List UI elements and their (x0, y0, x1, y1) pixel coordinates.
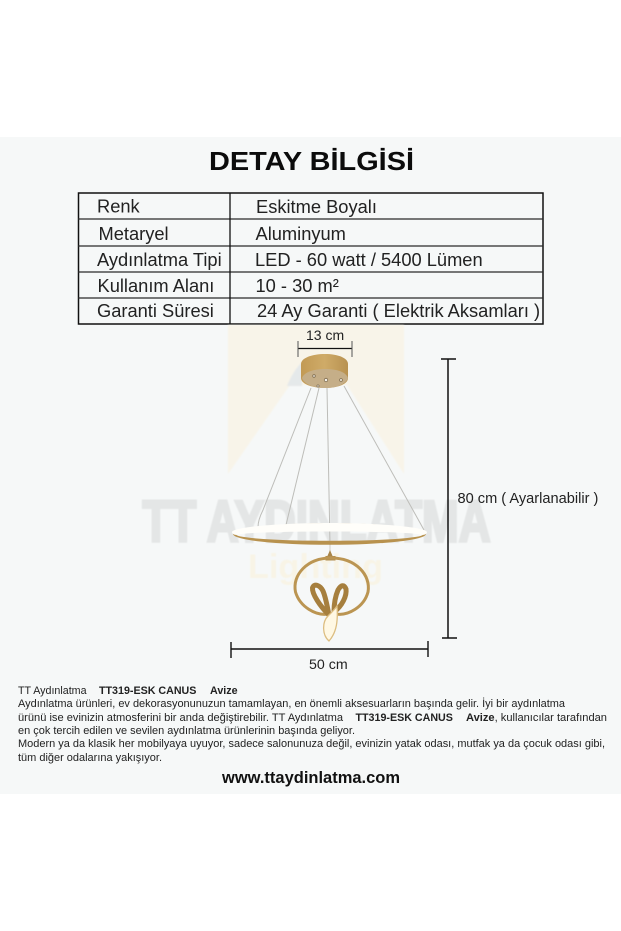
table values: Aluminyum (256, 223, 346, 244)
watermark: lighting: Lighting (248, 548, 383, 586)
table labels: Aydınlatma Tipi (97, 249, 222, 270)
table values: Eskitme Boyalı (256, 196, 377, 217)
dimension: 50 cm (231, 641, 428, 673)
text block: description: Avize (210, 685, 238, 697)
table labels (97, 196, 222, 321)
small ring and ribbon (295, 545, 368, 641)
panel: background (0, 137, 621, 794)
table values: 10 - 30 m² (256, 275, 339, 296)
ribbon loops (312, 585, 329, 615)
text block: description: ürünü ise evinizin atmosferini bir anda değiştirebilir. TT Aydınlatma (18, 712, 343, 724)
table values: 24 Ay Garanti ( Elektrik Aksamları ) (257, 300, 540, 321)
ribbon lance (324, 606, 337, 641)
lamp canopy (301, 354, 348, 388)
text block: description: Avize, kullanıcılar tarafından (466, 712, 607, 724)
large ring (232, 523, 427, 545)
text block: description (18, 685, 607, 764)
text block: description: tüm diğer odalarına yakışıyor. (18, 752, 162, 764)
table values: LED - 60 watt / 5400 Lümen (255, 249, 483, 270)
text block: description: TT319-ESK CANUS (99, 685, 196, 697)
table labels: Garanti Süresi (97, 300, 214, 321)
text block: description: TT Aydınlatma (18, 685, 87, 697)
watermark: grey shadow behind canopy (287, 362, 302, 386)
text block: description: en çok tercih edilen ve sevilen aydınlatma ürünlerinin başında geliyor. (18, 725, 355, 737)
table labels: Metaryel (98, 223, 169, 244)
website address: www.ttaydinlatma.com (221, 768, 400, 787)
table values (255, 196, 540, 321)
lamp wires (258, 386, 424, 545)
dimension: 50 cm: 50 cm (309, 657, 348, 673)
dimension: 80 cm (441, 359, 598, 638)
text block: description: Modern ya da klasik her mobilyaya uyuyor, sadece salonunuza değil, evinizin yatak odası, mutfak ya da çocuk odası gibi, (18, 738, 605, 750)
text block: description: Aydınlatma ürünleri, ev dekorasyonunuzun tamamlayan, en önemli aksesuarların başında gelir. İyi bir aydınlatma (18, 697, 565, 710)
title: DETAY BİLGİSİ (209, 148, 414, 176)
watermark: company name: TT AYDINLATMA (142, 490, 490, 554)
icon: pendant lamp (232, 354, 427, 641)
watermark: cream light cone (228, 325, 404, 474)
table labels: Renk (97, 196, 141, 216)
dimension: 80 cm: 80 cm ( Ayarlanabilir ) (458, 491, 598, 507)
dimension: 13 cm (298, 327, 352, 357)
panel: specification table (78, 193, 543, 324)
text block: description: TT319-ESK CANUS (356, 712, 453, 724)
dimension: 13 cm: 13 cm (306, 327, 344, 343)
table labels: Kullanım Alanı (98, 275, 214, 296)
